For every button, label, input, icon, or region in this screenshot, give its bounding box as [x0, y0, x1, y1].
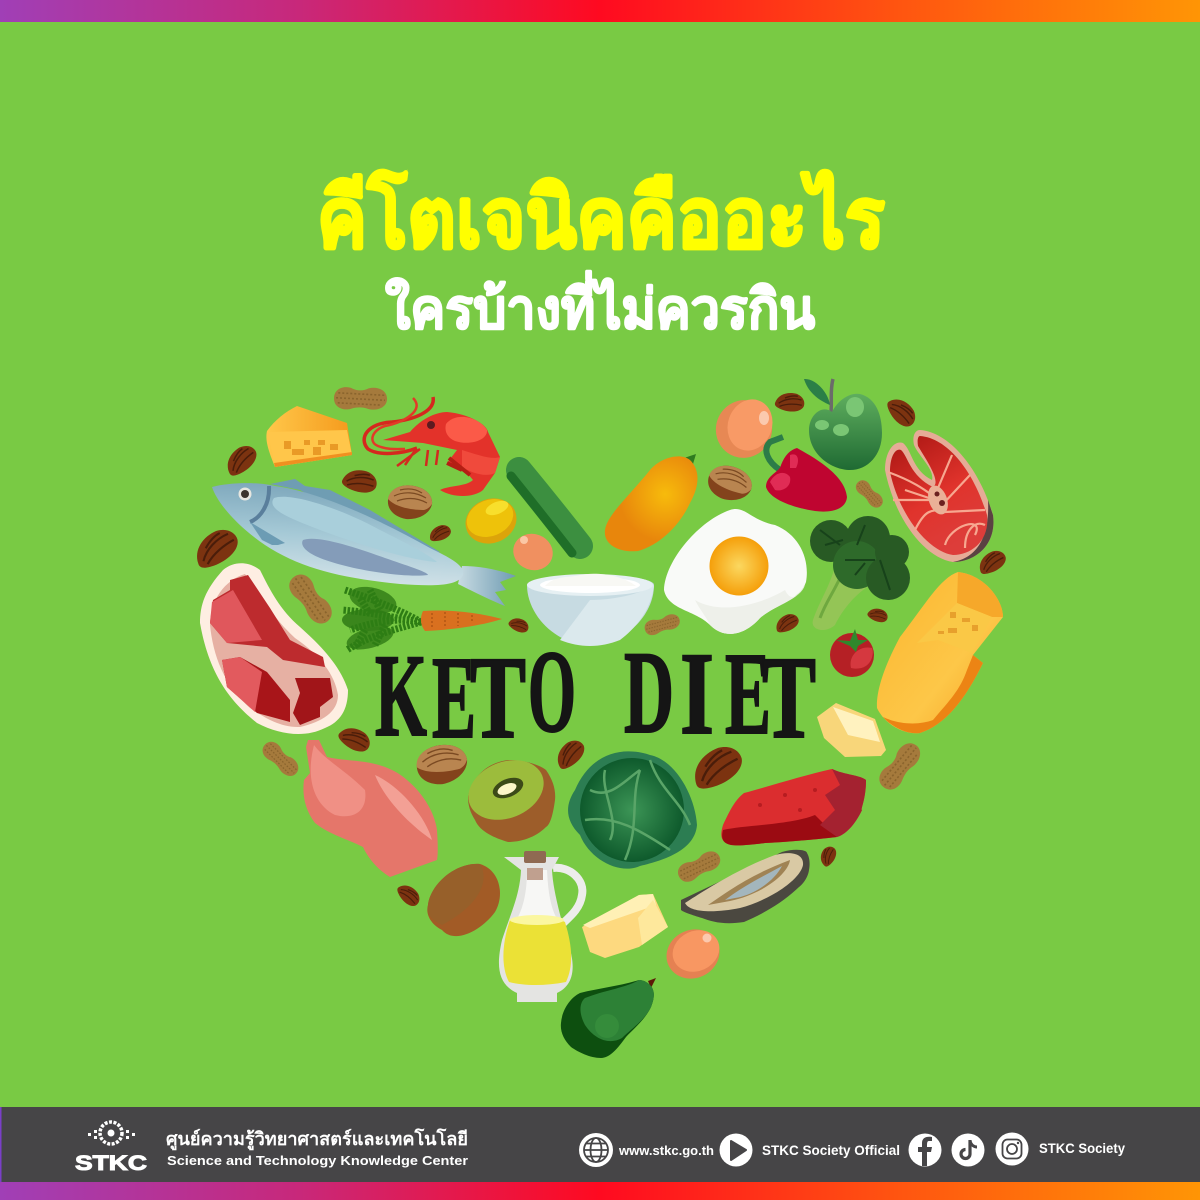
icon: fried egg	[664, 509, 807, 634]
icon: mango pepper	[605, 454, 698, 551]
icon: lemon	[459, 491, 523, 551]
icon: tomato	[830, 629, 874, 677]
icon: almond	[816, 844, 840, 868]
icon: keto diet lettering: D	[624, 627, 674, 758]
icon: butter small	[817, 703, 886, 757]
icon: keto diet lettering: E	[725, 628, 771, 759]
icon: salmon steak	[885, 430, 993, 562]
icon: egg	[658, 921, 728, 987]
icon: almond	[975, 547, 1009, 577]
icon: almond	[336, 721, 374, 757]
icon: almond	[551, 736, 589, 772]
icon: instagram	[996, 1132, 1028, 1166]
icon: oil bottle	[499, 851, 582, 1002]
icon: almond	[507, 614, 531, 636]
icon: keto diet lettering: E	[432, 632, 476, 763]
icon: egg	[508, 528, 558, 576]
icon: nut	[705, 462, 755, 504]
icon: peanut	[643, 612, 682, 637]
icon: kiwi half	[459, 749, 555, 842]
icon: almond	[866, 605, 890, 625]
icon: shrimp	[364, 397, 500, 496]
icon: nut	[388, 485, 432, 519]
youtube name: STKC Society Official	[762, 1142, 900, 1158]
icon: almond	[686, 740, 748, 794]
icon: red beef	[721, 769, 866, 845]
icon: cucumber	[511, 470, 580, 553]
subtitle: ใครบ้างที่ไม่ควรกิน	[385, 270, 815, 340]
icon: big cheese	[877, 572, 1003, 733]
icon: cabbage	[568, 751, 697, 869]
icon: facebook	[908, 1134, 942, 1166]
icon: broccoli	[810, 516, 910, 630]
website: www.stkc.go.th	[618, 1143, 714, 1158]
icon: keto diet lettering: I	[680, 628, 714, 759]
icon: butter block	[582, 894, 668, 958]
organisation name thai: ศูนย์ความรู้วิทยาศาสตร์และเทคโนโลยี	[166, 1128, 468, 1151]
icon: keto diet lettering: T	[470, 632, 526, 763]
icon: oyster	[681, 850, 810, 923]
icon: peanut	[675, 848, 724, 885]
organisation name english: Science and Technology Knowledge Center	[167, 1153, 468, 1168]
top gradient bar	[0, 0, 1200, 22]
icon: play	[720, 1134, 752, 1166]
icon: chicken breast	[303, 740, 438, 877]
icon: peanut top	[333, 386, 388, 412]
icon: egg	[708, 392, 780, 466]
icon: whole kiwi	[427, 864, 500, 936]
icon: fish	[212, 479, 516, 606]
icon: almond	[774, 390, 806, 414]
icon: apple	[804, 379, 882, 470]
instagram name: STKC Society	[1039, 1140, 1125, 1156]
icon: nut	[413, 739, 472, 790]
icon: keto diet lettering: K	[375, 630, 427, 761]
icon: keto diet lettering	[375, 626, 816, 763]
icon: peanut	[259, 738, 302, 781]
icon: almond	[221, 441, 261, 479]
icon: globe	[579, 1133, 613, 1167]
icon: peanut	[874, 739, 926, 794]
icon: carrot greens	[342, 582, 421, 654]
icon: peanut	[853, 477, 886, 511]
icon: carrot	[421, 610, 502, 631]
icon: avocado	[561, 978, 656, 1058]
icon: meat steak	[200, 563, 348, 734]
icon: almond	[773, 611, 801, 635]
title: คีโตเจนิคคืออะไร	[317, 170, 885, 265]
icon: almond	[427, 523, 453, 543]
logo: stkc: STKC	[75, 1152, 147, 1175]
icon: almond	[189, 524, 244, 572]
icon: almond	[884, 393, 920, 431]
icon: red pepper	[766, 437, 847, 512]
icon: tiktok	[952, 1134, 984, 1166]
heart of keto foods	[189, 379, 1009, 1058]
icon: almond	[340, 465, 380, 497]
icon: keto diet lettering: O	[528, 626, 576, 757]
icon: peanut	[285, 569, 337, 629]
icon: cheese wedge	[266, 406, 352, 467]
footer bar	[0, 1107, 1200, 1200]
icon: rice bowl	[527, 574, 654, 646]
icon: keto diet lettering: T	[762, 632, 816, 763]
logo: stkc	[75, 1122, 147, 1175]
icon: almond	[395, 880, 423, 910]
